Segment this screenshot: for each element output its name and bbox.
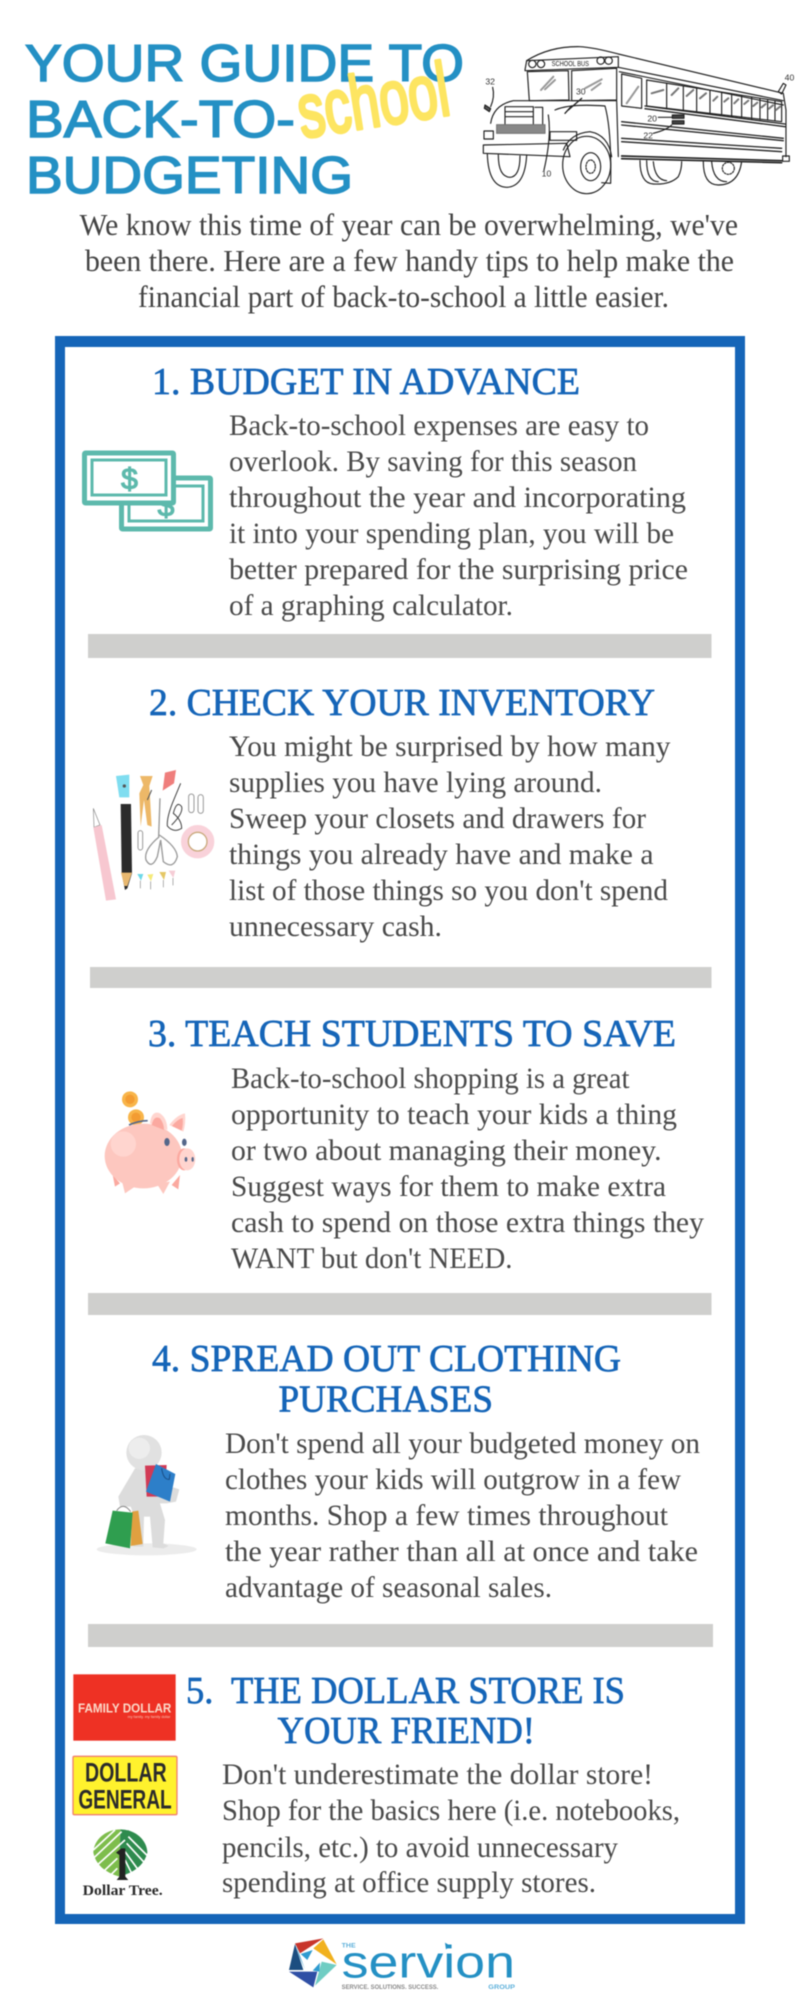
- text block: tip 5: Don't underestimate the dollar store!: [222, 1758, 653, 1791]
- text block: tip 1: throughout the year and incorporating: [229, 481, 686, 514]
- text block: tip 3: [231, 1062, 704, 1275]
- heading: tip 2: 2. CHECK YOUR INVENTORY: [149, 682, 655, 724]
- heading: tip 4: [152, 1338, 621, 1420]
- text block: tip 4: months. Shop a few times throughout: [225, 1499, 669, 1532]
- text block: tip 1: [229, 409, 688, 622]
- panel: tips frame: [55, 336, 745, 1924]
- text block: tip 2: things you already have and make a: [229, 838, 654, 871]
- text block: tip 1: of a graphing calculator.: [229, 589, 513, 622]
- icon: money bills: [84, 453, 210, 529]
- text block: tip 3: WANT but don't NEED.: [231, 1242, 512, 1275]
- text block: tip 2: unnecessary cash.: [229, 910, 442, 943]
- text block: tip 5: Shop for the basics here (i.e. notebooks,: [222, 1794, 680, 1827]
- icon: piggy bank: [105, 1091, 195, 1194]
- logo: the servion group: GROUP: [488, 1984, 516, 1991]
- panel: tip 4 spread out clothing purchases: [97, 1338, 700, 1604]
- panel: tip 3 teach students to save: [105, 1013, 704, 1275]
- icon: school bus: 30: [576, 87, 586, 97]
- panel: tip 2 check your inventory: [93, 682, 671, 943]
- intro text: We know this time of year can be overwhelming, we've: [80, 207, 738, 242]
- icon: school bus: [483, 47, 794, 194]
- panel: tip 5 the dollar store is your friend: [73, 1670, 680, 1899]
- panel: tip 1 budget in advance: [84, 361, 688, 622]
- icon: school bus: 22: [643, 131, 653, 141]
- icon: school bus: 10: [542, 169, 551, 179]
- icon: school supplies: [93, 770, 211, 901]
- intro text: financial part of back-to-school a little easier.: [138, 279, 669, 314]
- logo: dollar general: DOLLAR: [85, 1758, 167, 1788]
- heading: tip 5: YOUR FRIEND!: [278, 1710, 535, 1752]
- icon: school bus: 32: [485, 77, 495, 87]
- logo: dollar general: GENERAL: [78, 1784, 172, 1814]
- logos: dollar stores: [73, 1674, 177, 1899]
- logo: the servion group: THE: [342, 1942, 356, 1949]
- heading: tip 3: 3. TEACH STUDENTS TO SAVE: [148, 1013, 676, 1055]
- logo: the servion group: servion: [342, 1936, 515, 1987]
- icon: school bus: 20: [647, 113, 657, 123]
- text block: tip 3: or two about managing their money.: [231, 1134, 662, 1167]
- icon: shopper figure with bags: [97, 1435, 197, 1555]
- text block: tip 3: cash to spend on those extra things they: [231, 1206, 704, 1239]
- text block: tip 1: Back-to-school expenses are easy to: [229, 409, 649, 442]
- text block: tip 1: overlook. By saving for this season: [229, 445, 637, 478]
- text block: tip 4: [225, 1427, 700, 1604]
- intro text: [80, 207, 738, 314]
- title: BUDGETING: [26, 147, 353, 205]
- text block: tip 2: list of those things so you don't spend: [229, 874, 668, 907]
- icon: school bus: SCHOOL BUS: [552, 59, 589, 68]
- logo: the servion group: SERVICE. SOLUTIONS. SUCCESS.: [342, 1984, 438, 1991]
- intro text: been there. Here are a few handy tips to help make the: [85, 243, 734, 278]
- text block: tip 4: the year rather than all at once and take: [225, 1535, 698, 1568]
- title: school: [291, 47, 455, 155]
- logo: family dollar: [73, 1674, 176, 1741]
- title: BACK-TO-: [26, 91, 295, 149]
- text block: tip 2: You might be surprised by how many: [229, 730, 670, 763]
- text block: tip 2: [229, 730, 670, 943]
- text block: tip 1: it into your spending plan, you will be: [229, 517, 674, 550]
- text block: tip 4: Don't spend all your budgeted money on: [225, 1427, 700, 1460]
- icon: money bills: $: [158, 490, 175, 523]
- logo: dollar tree: Dollar Tree.: [83, 1883, 163, 1899]
- icon: money bills: $: [121, 463, 138, 496]
- text block: tip 2: supplies you have lying around.: [229, 766, 602, 799]
- text block: tip 5: pencils, etc.) to avoid unnecessary: [222, 1831, 618, 1864]
- text block: tip 1: better prepared for the surprising price: [229, 553, 688, 586]
- text block: tip 3: Suggest ways for them to make extra: [231, 1170, 666, 1203]
- title: YOUR GUIDE TO: [25, 35, 464, 93]
- logo: family dollar: FAMILY DOLLAR: [78, 1702, 171, 1716]
- logo: dollar tree: [83, 1829, 163, 1899]
- logo: dollar general: [73, 1756, 177, 1815]
- heading: tip 4: 4. SPREAD OUT CLOTHING: [152, 1338, 621, 1380]
- heading: tip 4: PURCHASES: [278, 1378, 493, 1420]
- logo: family dollar: my family. my family dollar: [128, 1714, 171, 1719]
- title: [25, 35, 464, 205]
- text block: tip 2: Sweep your closets and drawers for: [229, 802, 646, 835]
- heading: tip 5: 5. THE DOLLAR STORE IS: [186, 1670, 625, 1712]
- text block: tip 5: spending at office supply stores.: [222, 1866, 596, 1899]
- heading: tip 5: [186, 1670, 625, 1752]
- text block: tip 3: opportunity to teach your kids a thing: [231, 1098, 677, 1131]
- icon: school bus: 40: [785, 73, 794, 83]
- logo: the servion group: [289, 1936, 516, 1991]
- heading: tip 1: 1. BUDGET IN ADVANCE: [152, 361, 580, 403]
- text block: tip 3: Back-to-school shopping is a great: [231, 1062, 630, 1095]
- text block: tip 5: [222, 1758, 680, 1899]
- text block: tip 4: advantage of seasonal sales.: [225, 1571, 552, 1604]
- text block: tip 4: clothes your kids will outgrow in a few: [225, 1463, 681, 1496]
